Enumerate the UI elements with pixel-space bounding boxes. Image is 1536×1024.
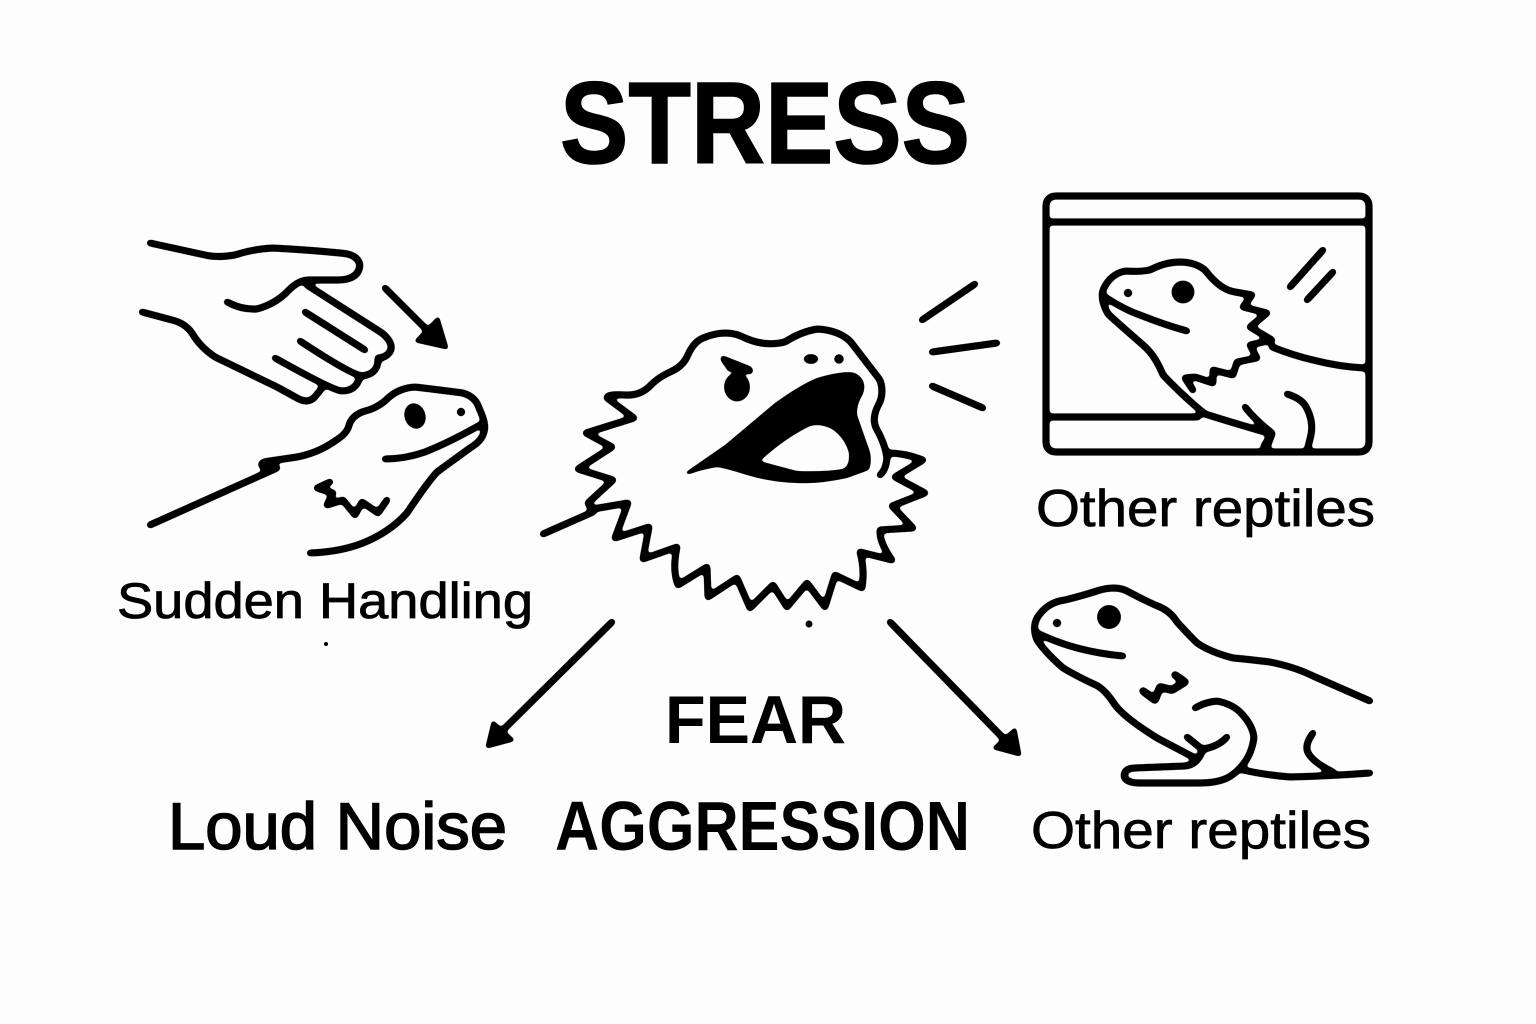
icon: side-view reptile (1034, 588, 1370, 783)
label: other reptiles top: Other reptiles (1036, 480, 1375, 538)
arrow: hand moving down (385, 288, 447, 348)
arrow: to loud noise (487, 622, 612, 747)
title: STRESS (560, 58, 970, 188)
label: aggression: AGGRESSION (555, 787, 970, 865)
sound lines (922, 284, 997, 408)
label: sudden handling: Sudden Handling (117, 573, 533, 629)
label: loud noise: Loud Noise (168, 789, 507, 863)
dot (324, 642, 328, 646)
arrow: to other reptiles (890, 622, 1020, 755)
label: other reptiles bottom: Other reptiles (1031, 802, 1371, 860)
icon: aggressive bearded dragon (543, 329, 925, 608)
icon: lizard being handled (150, 387, 485, 553)
open mouth (685, 372, 871, 483)
label: fear: FEAR (665, 682, 846, 758)
dot (806, 620, 812, 628)
icon: reptile in tank (1046, 196, 1369, 452)
icon: hand reaching (142, 243, 391, 401)
